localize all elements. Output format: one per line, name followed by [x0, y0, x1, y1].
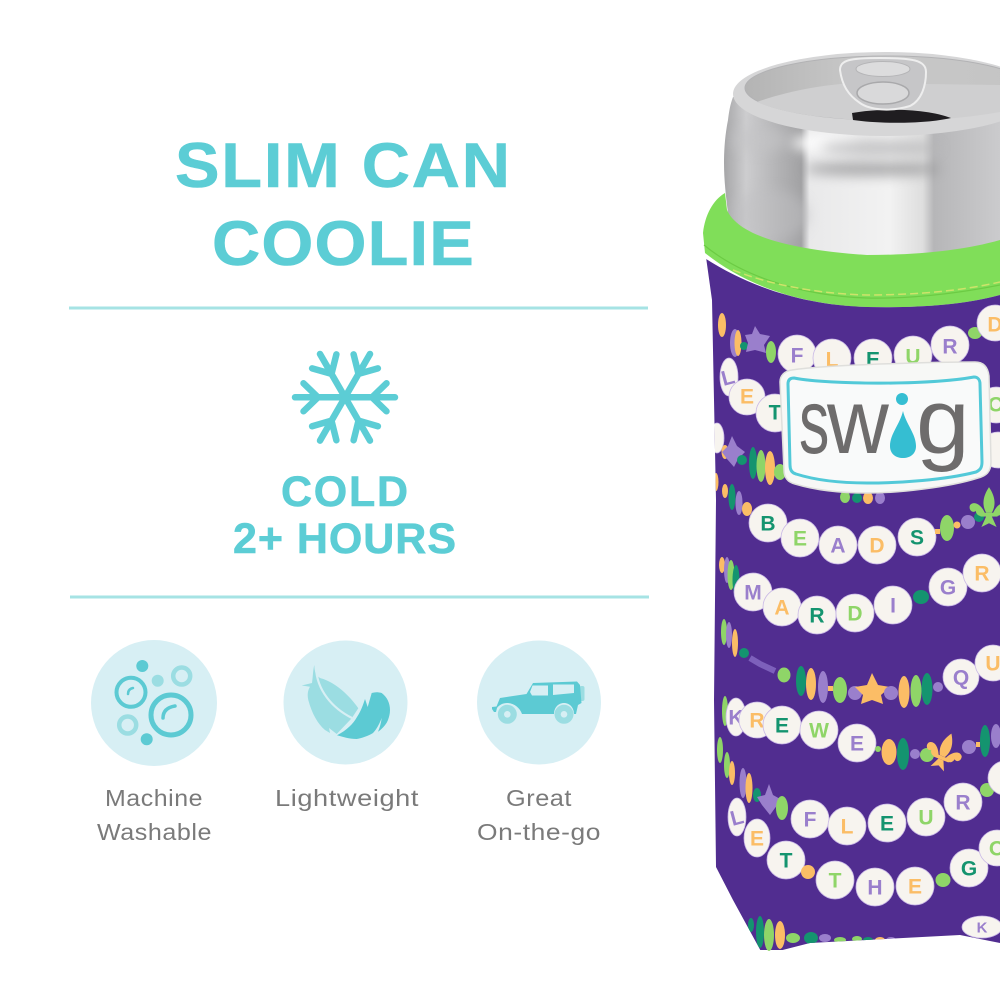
icon: snowflake	[276, 329, 414, 466]
feature: great on-the-go: Great	[506, 785, 572, 811]
bead row: fleur	[717, 737, 1000, 845]
feature: great on-the-go	[477, 640, 601, 845]
bead row: beads: B	[760, 512, 776, 536]
bead row: fleur de: F	[791, 344, 804, 368]
bead row: let the good: L	[728, 805, 746, 831]
bead row: let the good: G	[961, 858, 977, 880]
title: COOLIE	[212, 208, 474, 279]
bead row: fleur: F	[804, 808, 817, 832]
bead row: mardi gras: I	[890, 594, 896, 618]
bead row: fleur: L	[841, 816, 854, 838]
bead row: let the go: E	[740, 386, 754, 408]
bead row: beads: S	[910, 526, 924, 550]
bead row: beads: A	[830, 534, 846, 558]
logo wordmark: w	[826, 370, 890, 473]
bead row: mardi gras: M	[744, 582, 762, 604]
bead row: krewe	[722, 696, 1000, 776]
bead row: beads	[714, 473, 1000, 564]
bead row: let the good: E	[908, 876, 922, 898]
logo drop	[890, 393, 916, 458]
bead row: let the go: L	[719, 365, 737, 391]
feature: lightweight: Lightweight	[275, 785, 419, 811]
bead row: mardi gras: A	[774, 596, 790, 620]
bead row: fleur de	[718, 305, 1000, 377]
bead row: let the good: T	[829, 870, 842, 892]
bead row: fleur: U	[918, 806, 934, 830]
bead row: mardi gras	[719, 554, 1000, 634]
bead row: star charm: Q	[953, 666, 969, 690]
bead row: fleur de: R	[942, 336, 958, 358]
feature: machine washable: Washable	[97, 819, 212, 845]
product photo: can in coolie	[700, 52, 1000, 951]
logo patch: swig	[780, 362, 991, 493]
title: SLIM CAN	[175, 130, 510, 201]
icon: bubbles	[91, 640, 217, 766]
bead row: mardi gras: R	[974, 562, 990, 586]
bead row: fleur: R	[955, 792, 971, 814]
logo wordmark: g	[916, 370, 970, 473]
cold rating text	[233, 468, 456, 563]
feature: great on-the-go: On-the-go	[477, 819, 601, 845]
bead row: let the good	[728, 798, 1000, 906]
bead row: krewe: E	[850, 732, 864, 756]
bead row: star charm	[721, 619, 1000, 708]
bead row: bottom edge	[748, 916, 1000, 951]
bead row: fleur de: U	[905, 346, 921, 368]
bead row: krewe: E	[775, 714, 789, 738]
feature: lightweight	[275, 640, 419, 811]
bead row: beads: D	[869, 534, 885, 558]
bead row: charms above beads	[710, 423, 885, 504]
logo wordmark: s	[799, 369, 829, 473]
feature: machine washable	[91, 640, 217, 845]
bead row: let the go: T	[769, 402, 782, 424]
logo wordmark	[799, 369, 970, 473]
feature: machine washable: Machine	[105, 785, 203, 811]
icon: feather	[284, 640, 408, 764]
bead row: bottom edge: K	[977, 920, 988, 936]
purple coolie body with beads	[700, 255, 1000, 951]
bead row: fleur de: L	[826, 348, 839, 372]
bead row: mardi gras: G	[940, 576, 956, 600]
bead row: fleur de: E	[866, 348, 880, 372]
bead row: let the go	[719, 358, 1000, 468]
title	[175, 130, 510, 279]
aluminium can	[724, 52, 1000, 260]
bead row: fleur: E	[880, 812, 894, 836]
bead row: mardi gras: D	[847, 602, 863, 626]
bead row: let the good: E	[750, 828, 764, 850]
cold rating text: COLD	[281, 468, 408, 516]
bead row: let the good: T	[780, 850, 793, 872]
icon: jeep	[477, 640, 601, 764]
bead row: krewe: R	[749, 710, 765, 732]
green collar	[703, 193, 1000, 307]
bead row: mardi gras: R	[809, 604, 825, 628]
bead row: krewe: W	[809, 720, 829, 742]
bead row: let the good: H	[867, 876, 883, 900]
bead row: krewe: K	[728, 706, 744, 730]
bead row: beads: E	[793, 528, 807, 550]
cold rating text: 2+ HOURS	[233, 515, 456, 563]
